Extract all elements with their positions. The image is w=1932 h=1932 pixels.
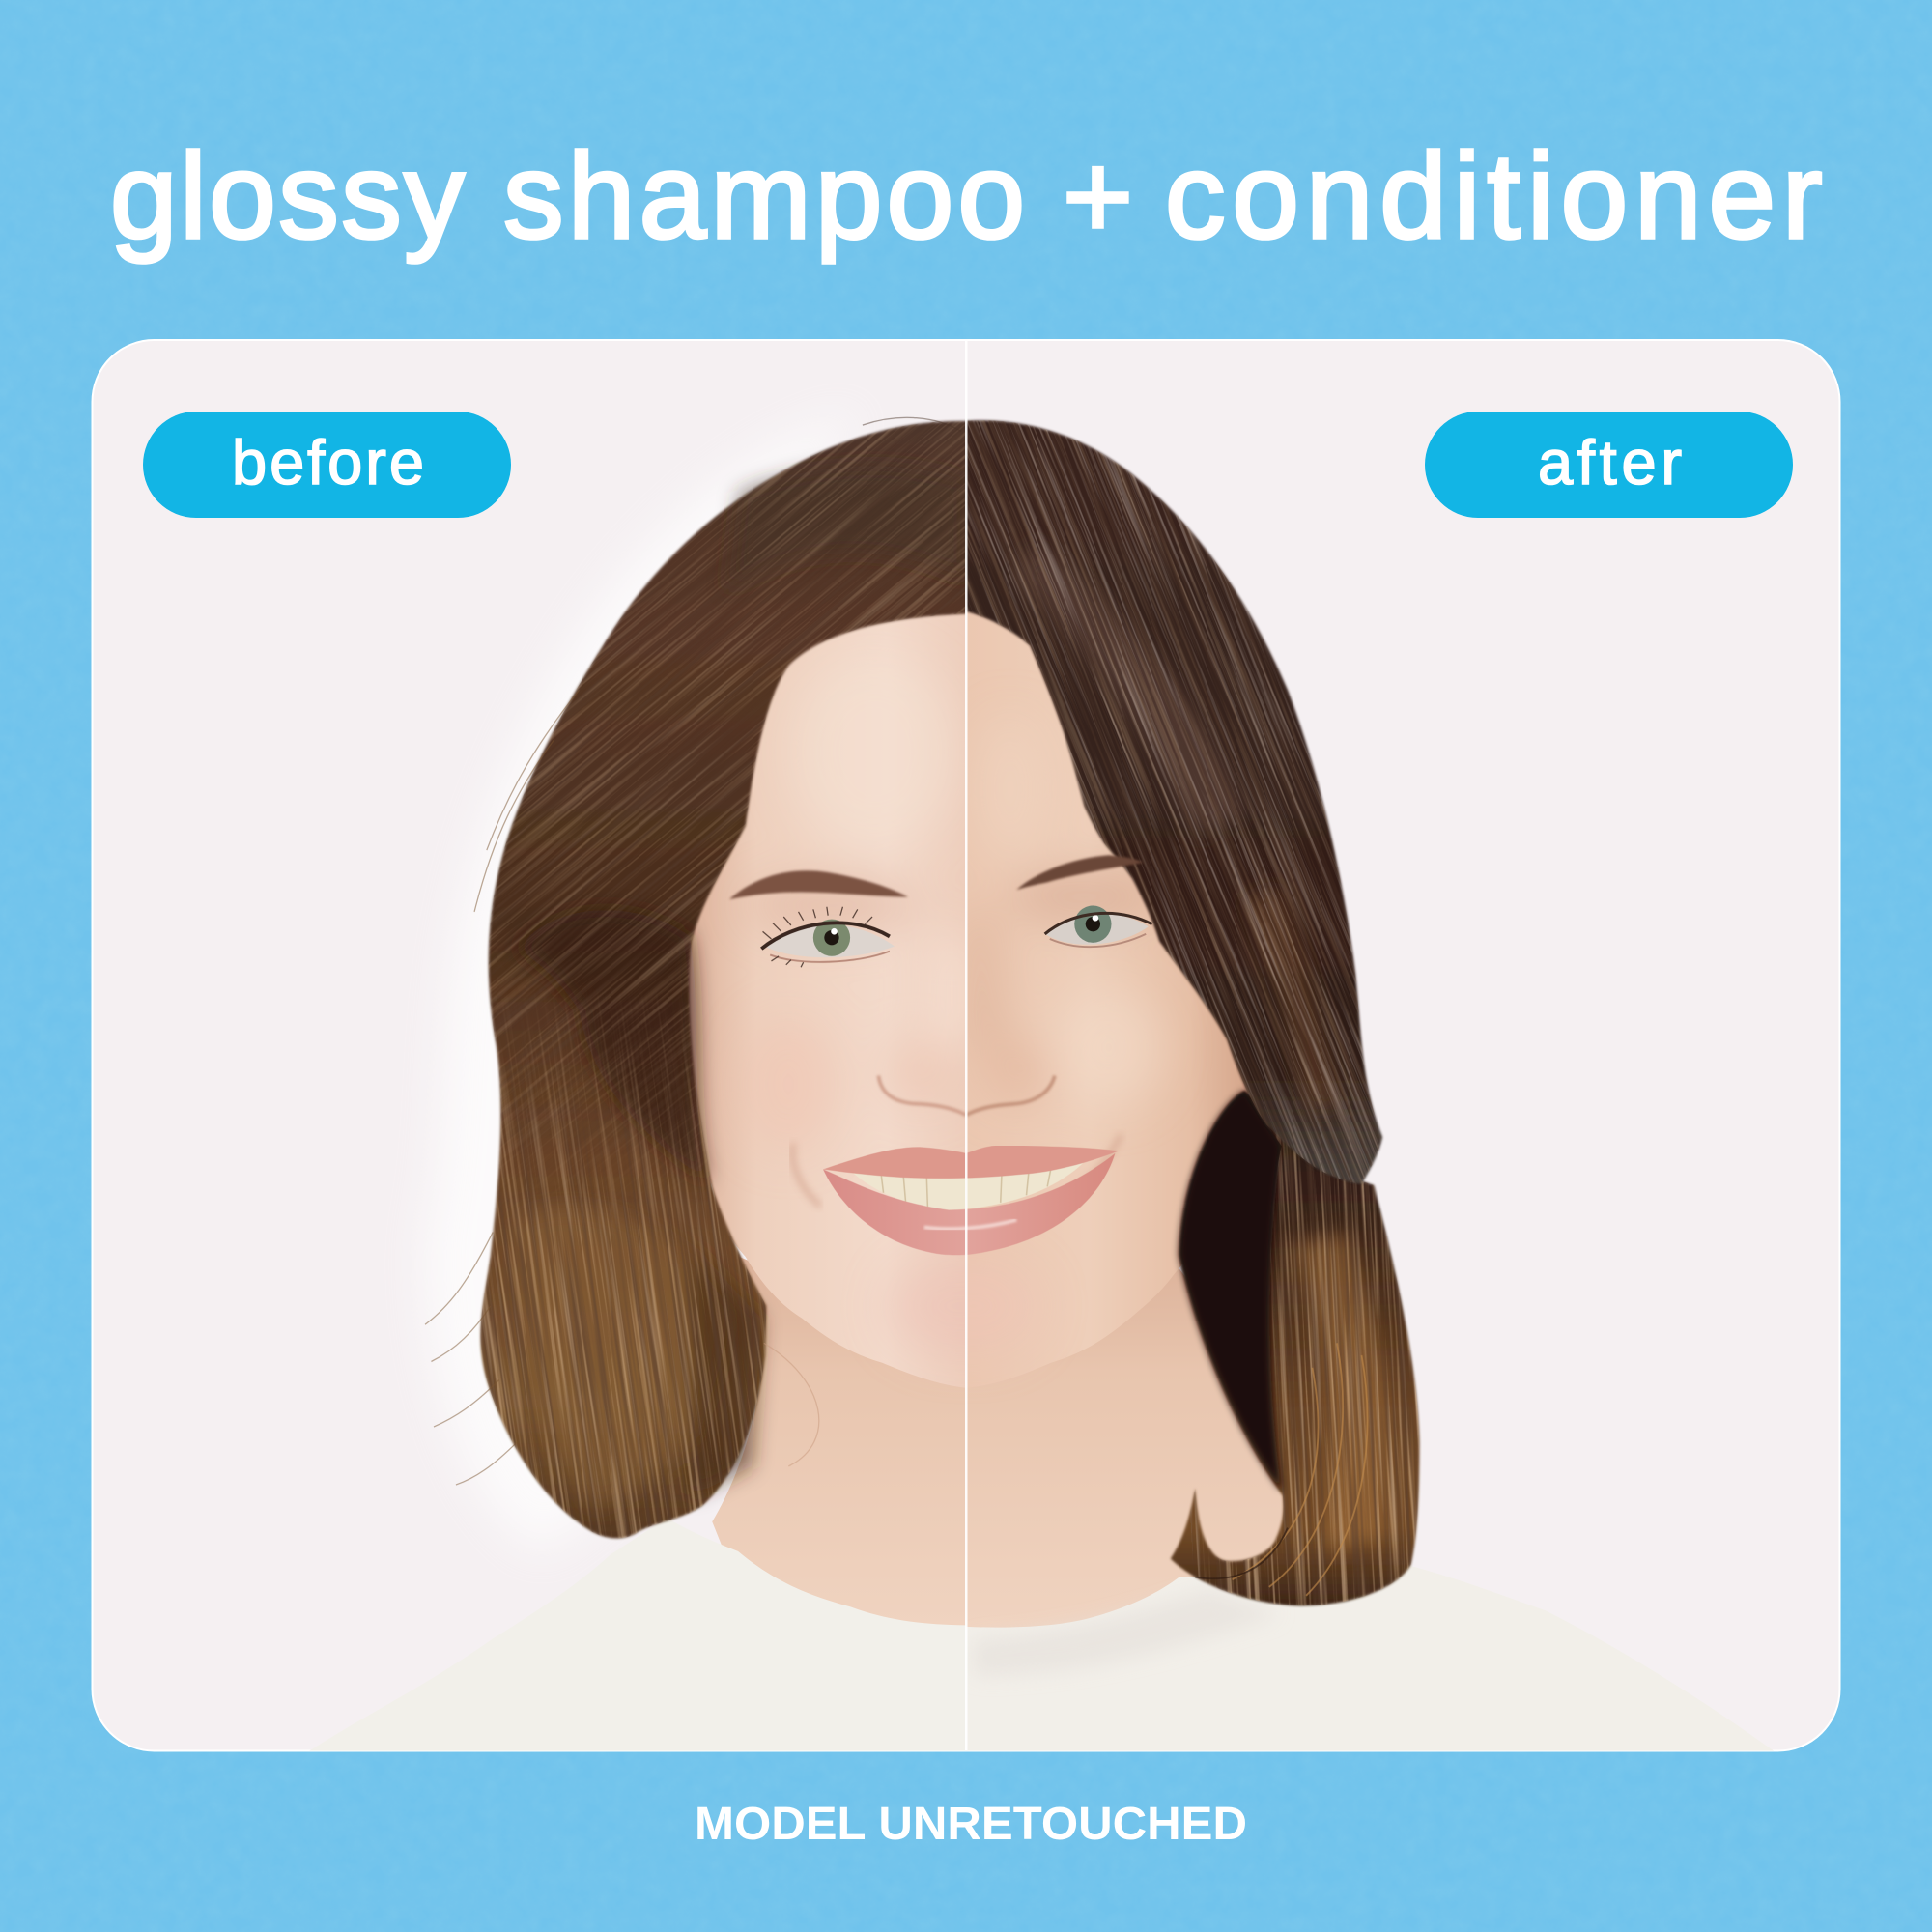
- photo: model portrait split down the centre: [309, 417, 1774, 1750]
- after half of portrait: [610, 268, 1780, 1756]
- lower hair shine after: [1288, 1233, 1387, 1552]
- footer note: MODEL UNRETOUCHED: [695, 1799, 1247, 1850]
- lower lip: [823, 1153, 1115, 1255]
- title: glossy: [110, 129, 467, 264]
- cheek and jaw shading before: [759, 735, 965, 1333]
- shirt before: [309, 1545, 966, 1750]
- title: conditioner: [1165, 129, 1829, 264]
- after label pill: [1425, 412, 1793, 518]
- lower curl strands after: [1195, 1343, 1368, 1596]
- face after: [958, 579, 1247, 1388]
- shirt after: [961, 1566, 1780, 1756]
- before half of portrait: [309, 417, 966, 1750]
- smile crease before: [792, 1144, 820, 1207]
- before label pill: before: [232, 427, 424, 497]
- hair shine after: [1010, 542, 1343, 1109]
- after label pill: after: [1538, 427, 1682, 497]
- hair before: [480, 421, 974, 1538]
- ear after: [1213, 1047, 1252, 1105]
- panel: before and after photo comparison: [91, 339, 1841, 1752]
- face before: [684, 579, 974, 1388]
- lower hair texture after: [1170, 1101, 1492, 1634]
- neck before: [712, 1257, 974, 1638]
- neck after: [961, 1257, 1288, 1638]
- eyebrow before: [729, 870, 908, 899]
- smile crease after: [1069, 1135, 1122, 1195]
- title: shampoo: [503, 129, 1029, 264]
- teeth: [850, 1155, 1091, 1210]
- before label pill: [143, 412, 511, 518]
- hair texture before: [481, 421, 965, 1538]
- eye before: [761, 907, 895, 967]
- hair texture after: [610, 268, 1691, 1431]
- infographic canvas: [91, 148, 1841, 1839]
- hair shading before: [515, 466, 966, 1509]
- tooth gaps: [881, 1168, 1051, 1210]
- nose before: [878, 1076, 966, 1115]
- title: +: [1063, 129, 1133, 264]
- centre divider line: [965, 340, 968, 1750]
- cheek and jaw shading after: [905, 715, 1164, 1355]
- eye after: [1045, 905, 1152, 947]
- upper lip: [823, 1146, 1119, 1179]
- lip gloss highlight: [924, 1220, 1016, 1229]
- flyaway halo around before hair: [442, 499, 729, 1521]
- back hair after: [1171, 1091, 1419, 1605]
- flyaway strands before: [425, 417, 961, 1485]
- nose after: [966, 1076, 1055, 1115]
- shirt shadow after: [974, 1589, 1282, 1676]
- dark under layer after: [1179, 1091, 1282, 1491]
- mouth: [823, 1146, 1119, 1255]
- panel card: [93, 340, 1839, 1750]
- eyebrow after: [1016, 855, 1144, 890]
- front hair after: [961, 420, 1382, 1184]
